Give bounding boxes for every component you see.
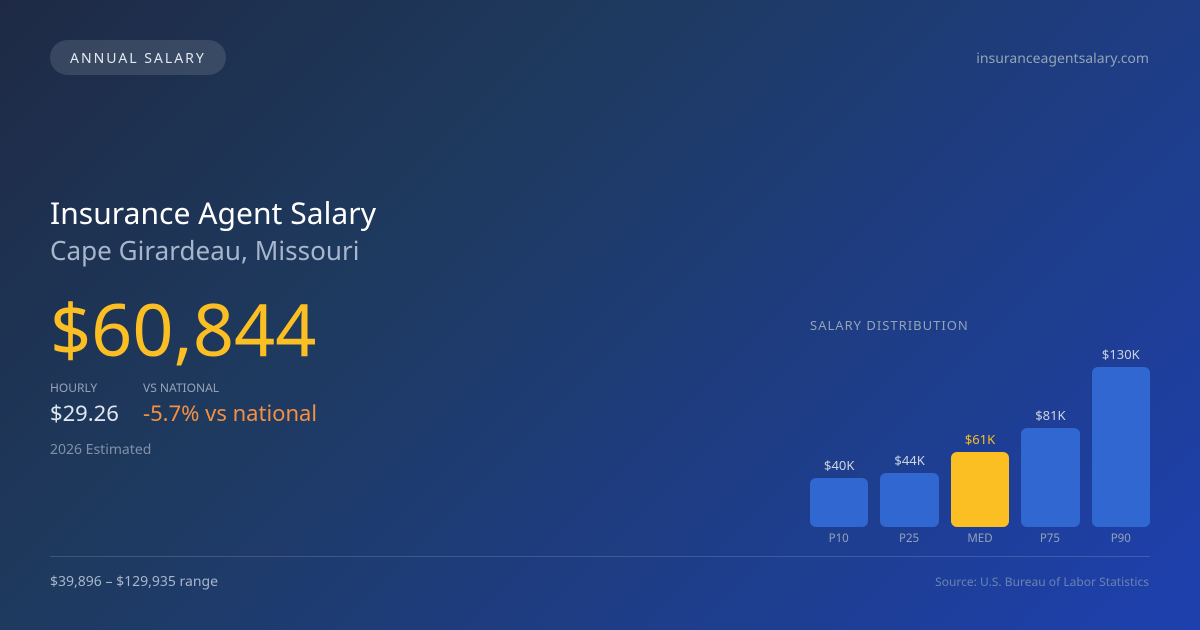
source: Source: U.S. Bureau of Labor Statistics (935, 573, 1149, 590)
versus national label: VS NATIONAL (143, 379, 219, 396)
bar: P25: $44K (894, 451, 925, 469)
bar: P75: $81K (1035, 406, 1066, 424)
badge: annual salary (50, 40, 226, 75)
bar: P10: $40K (824, 456, 854, 474)
bar: P75: P75 (1040, 531, 1060, 546)
hourly value: $29.26 (50, 398, 119, 428)
headline salary: $60,844 (50, 280, 316, 378)
bar: P90: $130K (1102, 345, 1140, 363)
subtitle: location: Cape Girardeau, Missouri (50, 232, 360, 268)
bar: median: MED (967, 531, 993, 546)
bar: P75 (1021, 406, 1080, 546)
estimate note: 2026 Estimated (50, 440, 151, 459)
bar: P90: P90 (1111, 531, 1131, 546)
bar: P90 (1092, 345, 1150, 546)
bar: median: $61K (965, 430, 995, 448)
salary range: $39,896 – $129,935 range (50, 572, 218, 591)
versus national value: -5.7% vs national (143, 398, 317, 428)
site domain: insuranceagentsalary.com (976, 49, 1149, 68)
bar: P10: P10 (829, 531, 849, 546)
bar: P25 (880, 451, 939, 546)
chart heading: SALARY DISTRIBUTION (810, 316, 969, 334)
title: Insurance Agent Salary (50, 192, 376, 233)
versus national stat (143, 379, 317, 428)
bar: median (951, 430, 1009, 546)
hourly label: HOURLY (50, 379, 97, 396)
bar: P25: P25 (899, 531, 919, 546)
hourly stat (50, 379, 119, 428)
badge label: ANNUAL SALARY (70, 49, 206, 68)
bar: P10 (810, 456, 868, 546)
bar chart: salary distribution (810, 316, 1150, 546)
